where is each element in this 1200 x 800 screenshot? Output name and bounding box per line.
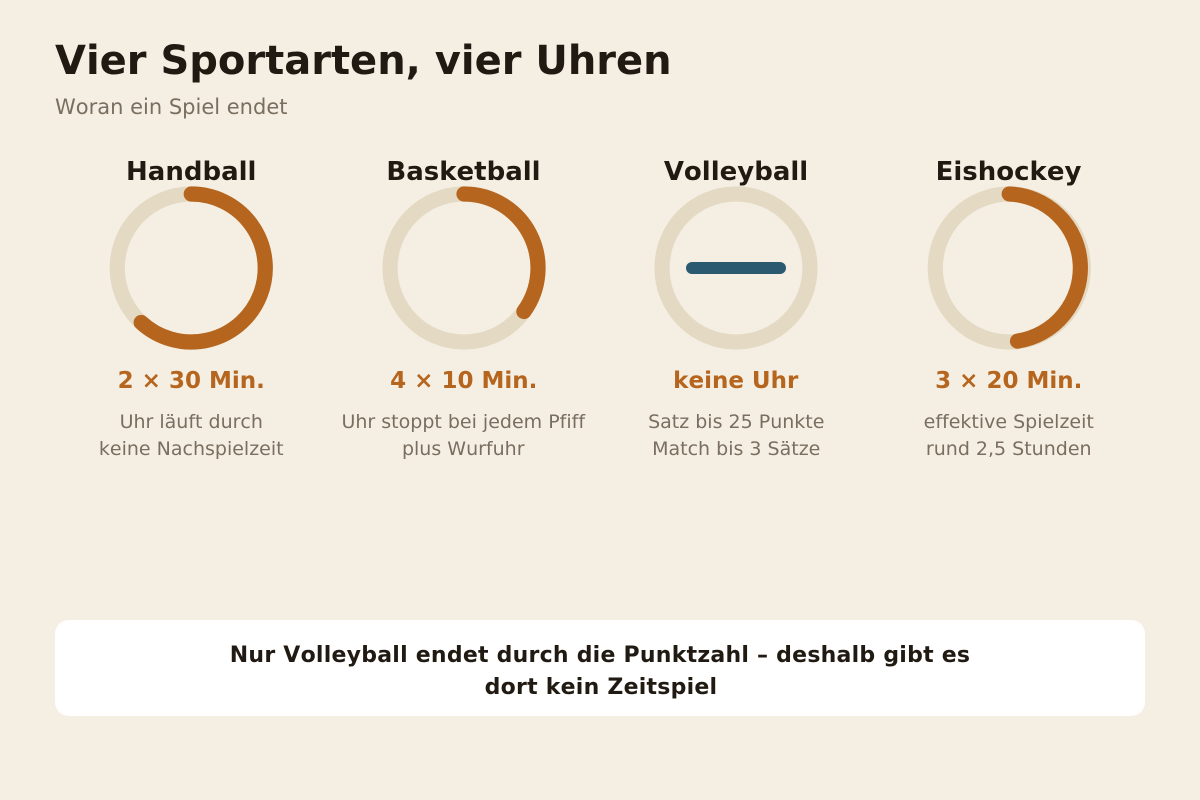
callout text: dort kein Zeitspiel bbox=[485, 675, 717, 700]
subtitle: Woran ein Spiel endet bbox=[55, 95, 287, 119]
value: Basketball: 4 × 10 Min. bbox=[390, 368, 537, 394]
title: Vier Sportarten, vier Uhren bbox=[55, 38, 672, 84]
clock dial: Eishockey bbox=[928, 186, 1091, 350]
description: Basketball: Uhr stoppt bei jedem Pfiff bbox=[341, 411, 585, 433]
callout text bbox=[230, 643, 970, 700]
description: Basketball bbox=[341, 411, 586, 460]
description: Handball: keine Nachspielzeit bbox=[99, 438, 284, 460]
panel: Volleyball bbox=[648, 157, 824, 460]
description: Handball: Uhr läuft durch bbox=[120, 411, 263, 433]
panel: Handball bbox=[99, 157, 284, 460]
clock dial: Basketball bbox=[382, 186, 546, 350]
value: Handball: 2 × 30 Min. bbox=[118, 368, 265, 394]
description: Volleyball: Match bis 3 Sätze bbox=[652, 438, 820, 460]
callout bbox=[55, 620, 1145, 716]
panel: Basketball bbox=[341, 157, 586, 460]
description: Handball bbox=[99, 411, 284, 460]
description: Basketball: plus Wurfuhr bbox=[402, 438, 525, 460]
panel: Eishockey bbox=[924, 157, 1094, 460]
clock dial: Volleyball bbox=[654, 186, 818, 350]
heading: Basketball: Basketball bbox=[386, 157, 541, 187]
value: Volleyball: keine Uhr bbox=[673, 368, 798, 394]
description: Volleyball bbox=[648, 411, 824, 460]
description: Eishockey bbox=[924, 411, 1094, 460]
callout text: Nur Volleyball endet durch die Punktzahl – deshalb gibt es bbox=[230, 643, 970, 668]
heading: Handball: Handball bbox=[126, 157, 256, 187]
heading: Volleyball: Volleyball bbox=[664, 157, 808, 187]
description: Eishockey: rund 2,5 Stunden bbox=[926, 438, 1092, 460]
clock dial: Handball bbox=[110, 186, 273, 350]
description: Eishockey: effektive Spielzeit bbox=[924, 411, 1094, 433]
value: Eishockey: 3 × 20 Min. bbox=[935, 368, 1082, 394]
description: Volleyball: Satz bis 25 Punkte bbox=[648, 411, 824, 433]
heading: Eishockey: Eishockey bbox=[936, 157, 1081, 187]
